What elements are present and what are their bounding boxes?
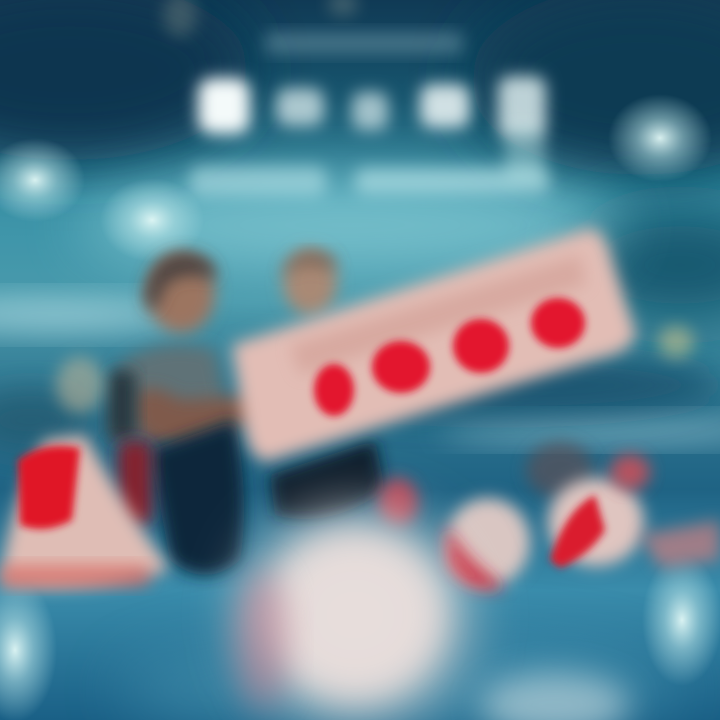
player right (270, 249, 385, 519)
foreground large ball (236, 515, 630, 720)
red block 3 (453, 319, 509, 373)
banner panel (232, 228, 636, 462)
floor red strip (640, 520, 720, 568)
head and hair (147, 253, 215, 333)
banner faint text (290, 255, 586, 375)
red block 2 (372, 341, 430, 393)
distant head (526, 442, 594, 498)
banner (232, 228, 636, 462)
title: top line (265, 32, 463, 54)
left foreground: red and white object (0, 357, 170, 588)
player left (108, 253, 270, 575)
red block 4 (531, 298, 585, 348)
title: main line (198, 76, 546, 138)
small red object (378, 478, 418, 526)
small yellow light (658, 326, 694, 358)
jersey (110, 345, 228, 440)
arm (135, 389, 270, 446)
shorts (270, 440, 385, 519)
dark side (108, 370, 136, 440)
right foreground: balls and players (378, 442, 720, 589)
ball centre right (446, 498, 530, 586)
ball right (548, 478, 644, 566)
shorts (150, 420, 244, 575)
blurred title block (190, 32, 550, 196)
red block 1 (314, 364, 354, 416)
head (283, 249, 337, 315)
title: lower line (190, 130, 550, 196)
